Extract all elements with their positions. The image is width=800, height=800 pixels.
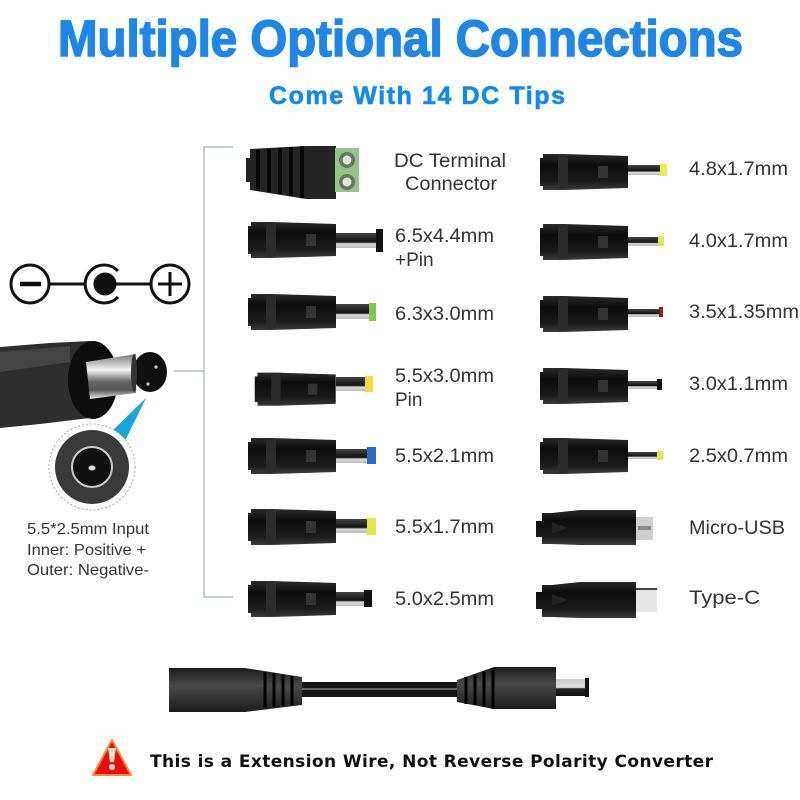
tip: 2.5x0.7mm xyxy=(540,438,663,474)
label: 4.0x1.7mm: 4.0x1.7mm xyxy=(689,231,788,252)
label: 5.5x2.1mm: 5.5x2.1mm xyxy=(395,446,494,467)
label: 3.0x1.1mm: 3.0x1.1mm xyxy=(689,374,788,395)
label: 5.5x3.0mm Pin xyxy=(395,366,494,411)
tip: 5.5x2.1mm xyxy=(248,438,376,474)
tip: 5.5x3.0mm xyxy=(255,373,373,406)
bracket connector line xyxy=(174,147,233,597)
label: 5.0x2.5mm: 5.0x2.5mm xyxy=(395,589,494,610)
blue pointer xyxy=(112,398,146,441)
label: 6.5x4.4mm +Pin: 6.5x4.4mm xyxy=(395,226,494,247)
warning text: This is a Extension Wire, Not Reverse Polarity Converter xyxy=(150,752,714,772)
label: 6.5x4.4mm +Pin: +Pin xyxy=(395,250,434,271)
input specification text: Inner: Positive + xyxy=(27,542,146,559)
label: 6.5x4.4mm +Pin xyxy=(395,226,494,271)
icon: warning triangle xyxy=(93,740,131,775)
label: DC Terminal Connector: DC Terminal xyxy=(394,151,506,172)
extension wire xyxy=(169,667,589,712)
tip: Micro-USB xyxy=(536,510,653,545)
subtitle: Come With 14 DC Tips xyxy=(269,82,565,110)
label: 6.3x3.0mm: 6.3x3.0mm xyxy=(395,304,494,325)
label: Micro-USB: Micro-USB xyxy=(689,518,785,539)
input close-up icon xyxy=(49,424,135,510)
label: 2.5x0.7mm: 2.5x0.7mm xyxy=(689,446,788,467)
input plug photo xyxy=(0,341,167,428)
tip: 5.5x1.7mm xyxy=(248,509,376,545)
label: DC Terminal Connector xyxy=(394,151,506,195)
tip: Type-C xyxy=(536,582,657,618)
title: Multiple Optional Connections xyxy=(58,10,743,67)
input specification text: Outer: Negative- xyxy=(27,562,149,579)
tip: 3.0x1.1mm xyxy=(540,368,662,404)
label: 5.5x3.0mm Pin: Pin xyxy=(395,390,422,411)
tip: 5.0x2.5mm xyxy=(248,581,372,617)
input specification text xyxy=(27,521,150,579)
label: 4.8x1.7mm: 4.8x1.7mm xyxy=(689,159,788,180)
tip: 4.8x1.7mm xyxy=(540,154,667,190)
label: Type-C: Type-C xyxy=(689,588,760,609)
label: DC Terminal Connector: Connector xyxy=(405,174,498,195)
tip: 6.3x3.0mm xyxy=(248,294,376,330)
input specification text: 5.5*2.5mm Input xyxy=(27,521,150,538)
label: 5.5x1.7mm: 5.5x1.7mm xyxy=(395,517,494,538)
tip: DC terminal connector xyxy=(246,146,359,199)
icon: polarity symbol xyxy=(11,265,189,303)
label: 5.5x3.0mm Pin: 5.5x3.0mm xyxy=(395,366,494,387)
label: 3.5x1.35mm: 3.5x1.35mm xyxy=(689,302,799,323)
tip: 4.0x1.7mm xyxy=(540,224,664,260)
tip: 6.5x4.4mm xyxy=(248,222,383,258)
tip: 3.5x1.35mm xyxy=(540,296,663,332)
